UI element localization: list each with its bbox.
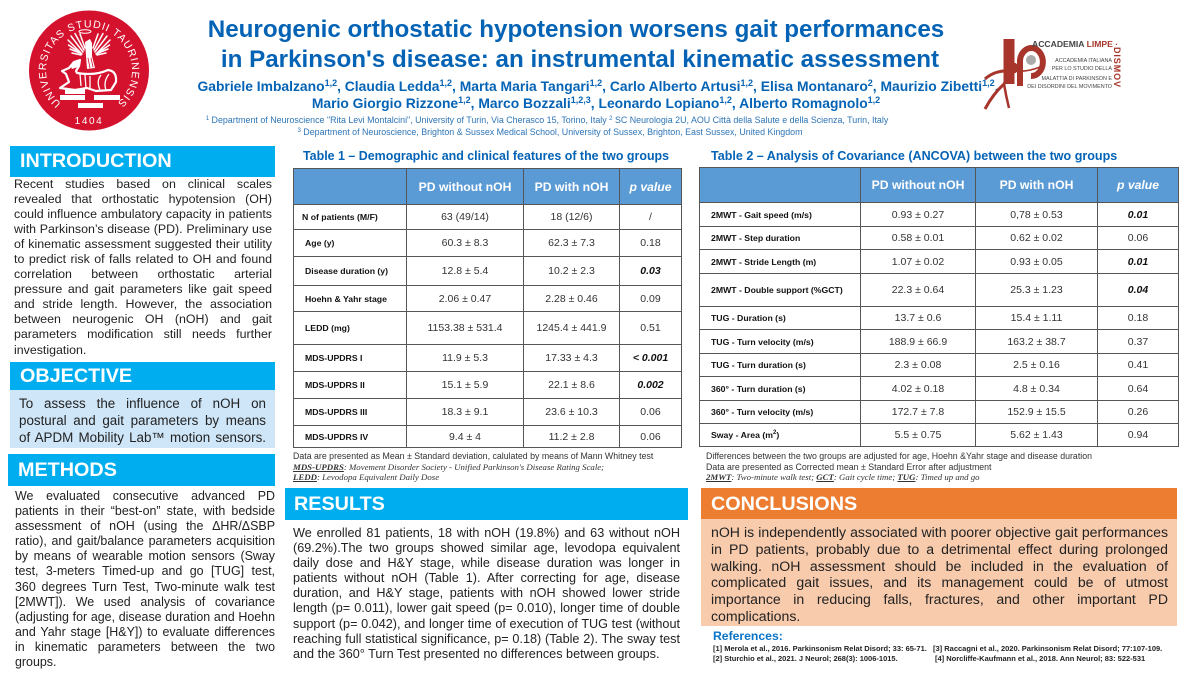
logo: Accademia LIMPE DISMOV: DISMOV xyxy=(1112,47,1122,88)
text: introduction body: between neurogenic OH (nOH) and gait xyxy=(14,312,272,326)
table 2: ANCOVA between groups: 0.94 xyxy=(1128,429,1148,441)
text: results body: support (p= 0.042), and longer time of execution of TUG test (without xyxy=(293,617,680,631)
text: methods body: groups. xyxy=(15,655,56,669)
text: conclusions body: complicated gait issues, and its management could be of utmost xyxy=(711,574,1168,590)
text: methods body: patients in their “best-on” state, with bedside xyxy=(15,504,275,518)
table 2: ANCOVA between groups: Sway - Area (m2) xyxy=(711,430,779,440)
heading: references: References: xyxy=(713,629,783,643)
table 2: ANCOVA between groups: 0.93 ± 0.27 xyxy=(892,208,944,220)
table 1: demographic and clinical features: p value xyxy=(630,180,672,194)
heading: table 2 title: Table 2 – Analysis of Covariance (ANCOVA) between the two groups xyxy=(711,149,1117,163)
table 2: ANCOVA between groups: 2MWT - Step duration xyxy=(711,233,800,243)
table 2: ANCOVA between groups: 0.18 xyxy=(1128,312,1148,324)
table 1: demographic and clinical features: 17.33 ± 4.3 xyxy=(545,352,598,364)
table 1: demographic and clinical features: 1153.38 ± 531.4 xyxy=(427,322,503,334)
table 2: ANCOVA between groups: 5.62 ± 1.43 xyxy=(1010,429,1063,441)
table 2: ANCOVA between groups: 0.01 xyxy=(1128,256,1148,268)
heading: methods xyxy=(8,454,275,486)
table 1: demographic and clinical features: Hoehn & Yahr stage xyxy=(305,294,387,304)
table 2: ANCOVA between groups: 25.3 ± 1.23 xyxy=(1010,284,1063,296)
text: conclusions body: nOH is independently associated with poorer objective gait performances xyxy=(711,524,1168,540)
table 2: ANCOVA between groups: p value xyxy=(1117,178,1159,192)
table 2: ANCOVA between groups: 2MWT - Double support (%GCT) xyxy=(711,285,843,295)
table 1: demographic and clinical features: MDS-UPDRS IV xyxy=(305,432,368,442)
logo: Accademia LIMPE DISMOV: ACCADEMIA LIMPE · xyxy=(1032,39,1118,49)
text: results body: daily dose and H&Y stage, while disease duration was longer in xyxy=(293,556,680,570)
table 2: ANCOVA between groups: TUG - Turn velocity (m/s) xyxy=(711,336,814,346)
text: reference list: [2] Sturchio et al., 2021. J Neurol; 268(3): 1006-1015. xyxy=(713,654,898,663)
table 2: ANCOVA between groups: 0.93 ± 0.05 xyxy=(1010,256,1063,268)
text: results body: (69.2%).The two groups showed similar age, levodopa equivalent xyxy=(293,541,680,555)
table 1: demographic and clinical features: / xyxy=(649,211,652,223)
table 2: ANCOVA between groups: 0.26 xyxy=(1128,406,1148,418)
table 1: demographic and clinical features: 15.1 ± 5.9 xyxy=(442,379,488,391)
note: table 1 footnotes xyxy=(292,451,654,482)
table 2: ANCOVA between groups xyxy=(699,167,1179,447)
table 2: ANCOVA between groups: 1.07 ± 0.02 xyxy=(892,256,944,268)
text: reference list xyxy=(713,644,1162,663)
text: reference list: [4] Norcliffe-Kaufmann et al., 2018. Ann Neurol; 83: 522-531 xyxy=(935,654,1145,663)
text: objective body: of APDM Mobility Lab™ motion sensors. xyxy=(19,430,266,445)
text: conclusions body xyxy=(711,524,1168,624)
text: methods body xyxy=(15,489,275,669)
logo: Accademia LIMPE DISMOV: ACCADEMIA ITALIANA xyxy=(1055,58,1112,64)
logo: Accademia LIMPE DISMOV: MALATTIA DI PARKINSON E xyxy=(1042,76,1112,82)
table 1: demographic and clinical features: 11.2 ± 2.8 xyxy=(549,430,594,442)
crest year: 1404 xyxy=(75,116,103,127)
panel: methods xyxy=(8,454,275,669)
table 2: ANCOVA between groups: 0.01 xyxy=(1128,208,1148,220)
text: introduction body: of kinematic assessment suggested their utility xyxy=(14,237,272,251)
text: methods body: assessment of nOH (using the ΔHR/ΔSBP xyxy=(15,519,275,533)
panel: results xyxy=(285,488,688,661)
table 2: ANCOVA between groups: 0.58 ± 0.01 xyxy=(892,232,944,244)
text: results body: and the 360° Turn Test presented no differences between groups. xyxy=(293,647,660,661)
text: conclusions body: importance in reducing falls, fractures, and other important PD xyxy=(711,591,1168,607)
heading: introduction: INTRODUCTION xyxy=(20,150,172,172)
table 1: demographic and clinical features: 0.09 xyxy=(640,292,661,304)
table 2: ANCOVA between groups: 0.41 xyxy=(1128,359,1148,371)
text: conclusions body: complications. xyxy=(711,608,800,624)
logo: Accademia LIMPE DISMOV xyxy=(984,39,1122,110)
authors: Gabriele Imbalzano1,2, Claudia Ledda1,2, Marta Maria Tangari1,2, Carlo Alberto Artusi1,2, Elisa Montanaro2, Maurizio Zibetti1,2, xyxy=(197,78,999,94)
table 2: ANCOVA between groups: TUG - Turn duration (s) xyxy=(711,360,806,370)
logo: Accademia LIMPE DISMOV: PER LO STUDIO DELLA xyxy=(1052,66,1112,72)
table 1: demographic and clinical features: 63 (49/14) xyxy=(441,211,489,223)
table 2: ANCOVA between groups: 0.04 xyxy=(1128,284,1148,296)
text: methods body: ratio), and gait/balance parameters acquisition xyxy=(15,534,275,548)
note: table 2 footnotes: Differences between the two groups are adjusted for age, Hoehn &Yahr stage and disease duration xyxy=(706,451,1092,461)
table 1: demographic and clinical features: 0.51 xyxy=(640,322,661,334)
table 1: demographic and clinical features: Age (y) xyxy=(305,238,334,248)
text: introduction body: could influence ambulatory capacity in patients xyxy=(14,207,272,221)
heading: introduction xyxy=(10,146,275,177)
text: introduction body xyxy=(14,177,272,357)
table 1: demographic and clinical features: 0.18 xyxy=(640,237,661,249)
table 2: ANCOVA between groups: 2MWT - Stride Length (m) xyxy=(711,256,816,266)
table 2: ANCOVA between groups: 15.4 ± 1.11 xyxy=(1011,312,1062,324)
panel: objective xyxy=(10,362,275,448)
text: results body: length (p= 0.011), lower gait speed (p= 0.010), longer time of double xyxy=(293,601,680,615)
table 1: demographic and clinical features: 11.9 ± 5.3 xyxy=(442,352,488,364)
text: results body: reaching full statistical significance, p= 0.18) (Table 2). The sway test xyxy=(293,632,680,646)
table 2: ANCOVA between groups: 152.9 ± 15.5 xyxy=(1007,406,1066,418)
note: table 2 footnotes: 2MWT: Two-minute walk test; GCT: Gait cycle time; TUG: Timed up and go xyxy=(706,472,980,482)
table 2: ANCOVA between groups: 4.02 ± 0.18 xyxy=(892,382,944,394)
text: introduction body: with Parkinson’s disease (PD). Preliminary use xyxy=(14,222,272,236)
heading: objective xyxy=(10,362,275,390)
crest lamb xyxy=(60,60,120,108)
references xyxy=(713,629,1162,663)
title: Neurogenic orthostatic hypotension worsens gait performances xyxy=(208,16,944,43)
table 1: demographic and clinical features: 0.06 xyxy=(640,406,661,418)
table 2: ANCOVA between groups: 5.5 ± 0.75 xyxy=(895,429,941,441)
table 2: ANCOVA between groups: 22.3 ± 0.64 xyxy=(892,284,944,296)
table 1: demographic and clinical features: 10.2 ± 2.3 xyxy=(548,265,595,277)
table 1: demographic and clinical features: 1245.4 ± 441.9 xyxy=(536,322,606,334)
table 2: ANCOVA between groups: 2.5 ± 0.16 xyxy=(1013,359,1060,371)
heading: results xyxy=(285,488,688,520)
note: table 1 footnotes: Data are presented as Mean ± Standard deviation, calulated by means of Mann Whitney test xyxy=(293,451,653,461)
logo: University of Turin crest xyxy=(29,10,149,130)
table 2: ANCOVA between groups: 0.64 xyxy=(1128,382,1148,394)
table 1: demographic and clinical features: 0.002 xyxy=(637,379,664,391)
text: methods body: [2MWT]). We used analysis of covariance xyxy=(15,595,275,609)
heading: results: RESULTS xyxy=(294,493,385,515)
text: methods body: by means of wearable motion sensors (Sway xyxy=(15,549,275,563)
table 2: ANCOVA between groups: 13.7 ± 0.6 xyxy=(895,312,941,324)
table 1: demographic and clinical features: 2.06 ± 0.47 xyxy=(439,292,491,304)
text: methods body: and Yahr stage [H&Y]) to evaluate differences xyxy=(15,625,275,639)
table 2: ANCOVA between groups: 0.37 xyxy=(1128,336,1148,348)
table 1: demographic and clinical features: 0.03 xyxy=(640,265,661,277)
note: table 1 footnotes: LEDD: Levodopa Equivalent Daily Dose xyxy=(293,472,439,482)
text: introduction body: to predict risk of falls related to OH and found xyxy=(14,252,272,266)
text: methods body: test, 3-meters Timed-up and go [TUG] test, xyxy=(15,564,275,578)
table 1: demographic and clinical features: 62.3 ± 7.3 xyxy=(548,237,595,249)
table 1: demographic and clinical features: 0.06 xyxy=(640,430,661,442)
text: introduction body: investigation. xyxy=(14,343,86,357)
table 1: demographic and clinical features: LEDD (mg) xyxy=(305,323,350,333)
table 2: ANCOVA between groups: 0.62 ± 0.02 xyxy=(1010,232,1063,244)
heading: objective: OBJECTIVE xyxy=(20,365,132,387)
authors: Mario Giorgio Rizzone1,2, Marco Bozzali1,2,3, Leonardo Lopiano1,2, Alberto Romagnolo1,2 xyxy=(312,95,880,111)
table 1: demographic and clinical features: 2.28 ± 0.46 xyxy=(545,292,598,304)
authors xyxy=(197,78,999,111)
text: objective body: postural and gait parameters by means xyxy=(19,413,266,428)
text: introduction body: pressure and gait parameters like gait speed xyxy=(14,282,272,296)
table 1: demographic and clinical features: MDS-UPDRS I xyxy=(305,353,362,363)
table 2: ANCOVA between groups: 2MWT - Gait speed (m/s) xyxy=(711,210,812,220)
note: table 2 footnotes: Data are presented as Corrected mean ± Standard Error after adjustment xyxy=(706,462,992,472)
text: objective body xyxy=(19,396,266,445)
text: introduction body: correlation between orthostatic arterial xyxy=(14,267,272,281)
affiliations: 3 Department of Neuroscience, Brighton & Sussex Medical School, University of Sussex, Brighton, East Sussex, United Kingdom xyxy=(297,127,803,137)
table 2: ANCOVA between groups: 2.3 ± 0.08 xyxy=(895,359,941,371)
table 2: ANCOVA between groups: PD with nOH xyxy=(1000,178,1073,192)
panel: introduction xyxy=(10,146,275,357)
note: table 2 footnotes xyxy=(706,451,1092,482)
heading: methods: METHODS xyxy=(18,459,117,481)
table 2: ANCOVA between groups: TUG - Duration (s) xyxy=(711,313,786,323)
affiliations: 1 Department of Neuroscience "Rita Levi Montalcini", University of Turin, Via Cherasco 15, Torino, Italy 2 SC Neurologia 2U, AOU Città della Salute e della Scienza, Turin, Italy xyxy=(206,115,888,125)
table 1: demographic and clinical features: 18 (12/6) xyxy=(550,211,593,223)
text: introduction body: revealed that orthostatic hypotension (OH) xyxy=(14,192,272,206)
text: methods body: (adjusting for age, disease duration and Hoehn xyxy=(15,610,275,624)
table 1: demographic and clinical features xyxy=(293,168,682,448)
table 1: demographic and clinical features: 22.1 ± 8.6 xyxy=(548,379,595,391)
table 1: demographic and clinical features: 23.6 ± 10.3 xyxy=(545,406,598,418)
title: in Parkinson's disease: an instrumental kinematic assessment xyxy=(221,46,939,73)
text: conclusions body: in PD patients, probably due to a detrimental effect during prolonged xyxy=(711,541,1168,557)
panel: conclusions xyxy=(701,488,1177,626)
logo: University of Turin crest: UNIVERSITAS STUDII TAURINENSIS xyxy=(38,20,140,108)
table 2: ANCOVA between groups: 188.9 ± 66.9 xyxy=(889,336,947,348)
text: introduction body: and stride length. However, the association xyxy=(14,297,272,311)
text: results body xyxy=(293,526,680,661)
text: methods body: We evaluated consecutive advanced PD xyxy=(15,489,275,503)
table 2: ANCOVA between groups: 360° - Turn velocity (m/s) xyxy=(711,407,813,417)
text: results body: patients without nOH (Table 1). After correcting for age, disease xyxy=(293,571,680,585)
text: introduction body: Recent studies based on clinical scales xyxy=(14,177,272,191)
table 2: ANCOVA between groups: 0,78 ± 0.53 xyxy=(1010,208,1063,220)
heading: conclusions xyxy=(701,488,1177,519)
table 1: demographic and clinical features: Disease duration (y) xyxy=(305,266,388,276)
table 1: demographic and clinical features: 18.3 ± 9.1 xyxy=(442,406,488,418)
text: results body: We enrolled 81 patients, 18 with nOH (19.8%) and 63 without nOH xyxy=(293,526,680,540)
table 1: demographic and clinical features: < 0.001 xyxy=(633,352,668,364)
table 1: demographic and clinical features: N of patients (M/F) xyxy=(302,212,378,222)
affiliations xyxy=(206,115,888,137)
text: reference list: [1] Merola et al., 2016. Parkinsonism Relat Disord; 33: 65-71. xyxy=(713,644,927,653)
table 1: demographic and clinical features: 9.4 ± 4 xyxy=(449,430,481,442)
table 1: demographic and clinical features: MDS-UPDRS II xyxy=(305,380,365,390)
text: introduction body: parameters modification still needs further xyxy=(14,327,272,341)
logo: Accademia LIMPE DISMOV: DEI DISORDINI DEL MOVIMENTO xyxy=(1027,84,1112,90)
table 2: ANCOVA between groups: PD without nOH xyxy=(872,178,964,192)
table 2: ANCOVA between groups: 172.7 ± 7.8 xyxy=(892,406,944,418)
table 2: ANCOVA between groups: 163.2 ± 38.7 xyxy=(1007,336,1066,348)
table 2: ANCOVA between groups: 0.06 xyxy=(1128,232,1148,244)
table 1: demographic and clinical features: 60.3 ± 8.3 xyxy=(442,237,488,249)
crest eagle xyxy=(68,30,110,69)
title xyxy=(208,16,944,73)
table 1: demographic and clinical features: PD with nOH xyxy=(535,180,608,194)
table 1: demographic and clinical features: MDS-UPDRS III xyxy=(305,407,367,417)
text: methods body: 360 degrees Turn Test, Two-minute walk test xyxy=(15,580,275,594)
table 1: demographic and clinical features: 12.8 ± 5.4 xyxy=(442,265,488,277)
text: reference list: [3] Raccagni et al., 2020. Parkinsonism Relat Disord; 77:107-109. xyxy=(933,644,1162,653)
text: conclusions body: walking. nOH assessment should be included in the evaluation of xyxy=(711,558,1168,574)
heading: conclusions: CONCLUSIONS xyxy=(711,493,857,515)
table 1: demographic and clinical features: PD without nOH xyxy=(419,180,511,194)
note: table 1 footnotes: MDS-UPDRS: Movement Disorder Society - Unified Parkinson's Disease Rating Scale; xyxy=(293,462,604,472)
table 2: ANCOVA between groups: 4.8 ± 0.34 xyxy=(1013,382,1060,394)
text: methods body: in kinematic parameters between the two xyxy=(15,640,275,654)
heading: table 1 title: Table 1 – Demographic and clinical features of the two groups xyxy=(303,149,669,163)
text: objective body: To assess the influence of nOH on xyxy=(19,396,266,411)
table 2: ANCOVA between groups: 360° - Turn duration (s) xyxy=(711,384,806,394)
text: results body: duration, and H&Y stage, patients with nOH showed lower stride xyxy=(293,586,680,600)
